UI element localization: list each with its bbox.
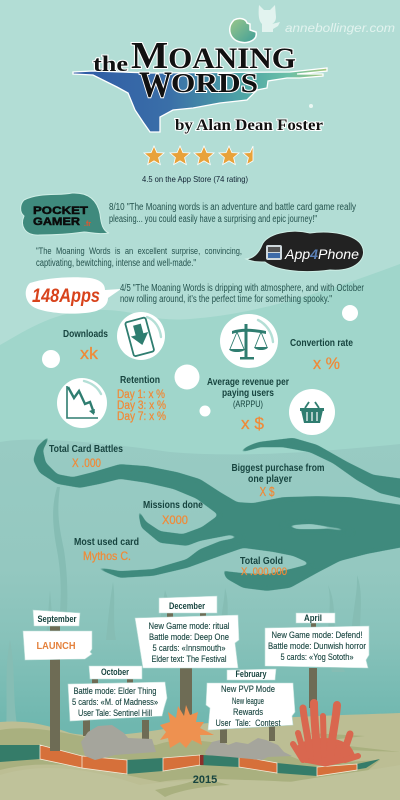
timeline band (0, 745, 380, 786)
stat: missions (143, 499, 203, 527)
sign: february (206, 669, 295, 743)
month: April (304, 613, 322, 623)
quote: now rolling around, it’s the perfect time for something spooky." (120, 294, 332, 305)
label (207, 376, 289, 409)
text: LAUNCH (36, 640, 76, 652)
month: December (169, 601, 205, 611)
seaweed silhouettes (6, 487, 362, 730)
icon: scales (220, 314, 278, 368)
stat: most used card (74, 536, 139, 563)
stat: retention (57, 374, 166, 428)
title: Moaning: MOANING (131, 35, 296, 77)
icon: cat (259, 5, 280, 32)
values: Day 7: x % (117, 411, 166, 423)
month: September (38, 614, 77, 624)
value: x % (313, 354, 340, 373)
label: Average revenue per (207, 376, 289, 388)
stat: total card battles (49, 443, 123, 470)
icon: basket (289, 389, 335, 435)
moon (230, 19, 256, 43)
text (216, 684, 281, 729)
text: 5 cards: «Innsmouth» (152, 643, 226, 654)
text: Battle mode: Dunwish horror (268, 641, 366, 652)
stat: arppu (207, 376, 335, 435)
value: xk (80, 344, 99, 363)
sign: april (265, 613, 369, 708)
label: Biggest purchase from (232, 462, 324, 474)
text: Elder text: The Festival (152, 654, 226, 665)
value: X $ (260, 484, 275, 499)
text: 5 cards: «M. of Madness» (72, 697, 158, 708)
value: X .000 (72, 456, 101, 470)
icon: falling chart (57, 378, 107, 428)
label: paying users (222, 387, 274, 399)
logo icon (266, 245, 282, 260)
month: February (236, 669, 266, 679)
values: Day 3: x % (117, 400, 166, 412)
text: Rewards (233, 707, 263, 718)
year: 2015 (193, 774, 217, 786)
text: User Tale: Sentinel Hill (78, 708, 152, 719)
review: app4phone (36, 231, 364, 272)
bubble (246, 231, 364, 272)
title: the: the (93, 51, 128, 76)
title: W: W (139, 65, 172, 106)
quote (120, 283, 365, 305)
rating text: 4.5 on the App Store (74 rating) (142, 174, 248, 184)
rock: right (205, 738, 292, 760)
logo text: 148Apps (32, 286, 100, 307)
ground (0, 713, 400, 800)
label: Missions done (143, 499, 203, 511)
bubble dot (309, 104, 313, 108)
value: x $ (241, 414, 265, 433)
value: X .000.000 (241, 566, 287, 578)
sign: october (68, 666, 167, 740)
stat: downloads (63, 312, 165, 363)
text: Battle mode: Elder Thing (74, 686, 156, 697)
water splash (73, 68, 327, 132)
octopus tentacles (34, 435, 400, 590)
logo text: POCKET (33, 205, 88, 217)
logo text (33, 205, 91, 228)
label: Total Gold (240, 555, 283, 567)
stat: conversion (220, 314, 353, 373)
label (232, 462, 324, 485)
text (268, 630, 366, 663)
label: Convertion rate (290, 337, 353, 349)
label: Retention (120, 374, 160, 386)
label: one player (248, 473, 292, 485)
label: Total Card Battles (49, 443, 123, 455)
quote: captivating, bewitching, intense and well-made." (36, 258, 196, 269)
review: pocket gamer (21, 193, 356, 235)
bubble (26, 277, 121, 314)
watermark text: annebollinger.com (285, 21, 395, 35)
text: 5 cards: «Yog Sototh» (280, 652, 354, 663)
quote (36, 246, 242, 269)
text: New league (232, 696, 264, 707)
value: Mythos C. (83, 549, 131, 563)
title: ords: ORDS (171, 68, 258, 98)
text: New Game mode: Defend! (272, 630, 362, 641)
text: User Tale: Contest (216, 718, 281, 729)
coral (293, 703, 358, 766)
stat: total gold (240, 555, 287, 578)
text: New Game mode: ritual (148, 621, 230, 632)
values: Day 1: x % (117, 389, 165, 401)
subtitle: by Alan Dean Foster (175, 117, 323, 134)
logo text: GAMER (33, 216, 80, 228)
rating (142, 146, 253, 184)
text: Battle mode: Deep One (149, 632, 229, 643)
quote: "The Moaning Words is an excellent surprise, convincing, (36, 246, 242, 257)
title logo (73, 19, 327, 134)
month: October (101, 667, 129, 677)
quote (109, 202, 356, 225)
value: X000 (162, 513, 188, 527)
text: New PVP Mode (221, 684, 275, 695)
urchin (160, 705, 214, 748)
decorative bubbles (42, 305, 358, 416)
logo text: App4Phone (284, 246, 359, 262)
icon: tablet download (117, 312, 165, 360)
values (117, 389, 166, 423)
watermark (259, 5, 395, 35)
review: 148apps (26, 277, 365, 314)
label: Most used card (74, 536, 139, 548)
icon: stars (144, 146, 253, 165)
sign: september (23, 610, 92, 751)
label: Downloads (63, 328, 108, 340)
bubble (21, 193, 109, 235)
text (148, 621, 230, 665)
text (72, 686, 158, 719)
logo text: .fr (84, 221, 91, 228)
sign: december (135, 596, 239, 728)
rock: left (81, 725, 156, 760)
label: (ARPPU) (233, 399, 263, 409)
tentacle: upper right (236, 438, 400, 500)
quote: pleasing... you could easily have a surprising and epic journey!" (109, 214, 317, 225)
stat: biggest purchase (232, 462, 324, 499)
